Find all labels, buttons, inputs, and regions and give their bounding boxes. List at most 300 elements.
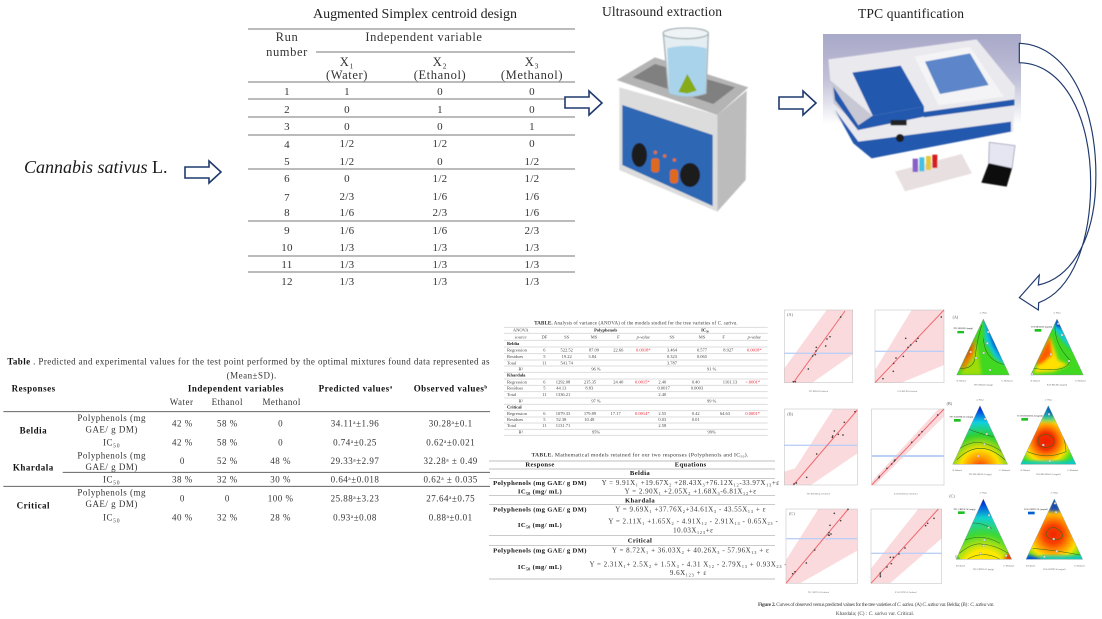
table rows: 1/6 bbox=[433, 191, 448, 203]
ternary A polyphenols: (A) bbox=[953, 314, 959, 319]
ternary A IC50: IC50 BELDIA (mg/ml) bbox=[1047, 383, 1067, 386]
ANOVA Beldia rows bbox=[507, 341, 762, 371]
ANOVA Beldia rows: 5 bbox=[543, 354, 546, 359]
ANOVA Beldia rows: 0.0018* bbox=[747, 348, 762, 353]
ANOVA Beldia rows: Total bbox=[507, 360, 517, 365]
row group: Khardala: 30 % bbox=[270, 475, 291, 485]
plot A IC50 bbox=[875, 310, 944, 393]
ANOVA Critical rows: 179.89 bbox=[584, 411, 597, 416]
ANOVA Khardala rows: 2.40 bbox=[658, 379, 667, 384]
row group: Critical: IC₅₀ bbox=[103, 513, 120, 523]
design table heading: Augmented Simplex centroid design bbox=[313, 7, 517, 22]
table rows: 2 bbox=[284, 104, 290, 116]
ternary B polyphenols: A: Water bbox=[976, 399, 984, 402]
ternary B polyphenols bbox=[947, 399, 1011, 476]
table rows: 1/2 bbox=[433, 173, 447, 185]
ANOVA header: F bbox=[617, 335, 620, 340]
table rows: 7 bbox=[284, 192, 290, 204]
ANOVA Critical rows: Total bbox=[507, 423, 517, 428]
table rows bbox=[281, 86, 540, 288]
table rows: 11 bbox=[281, 259, 293, 271]
ANOVA Critical rows: 95% bbox=[592, 429, 600, 434]
ANOVA Critical rows: 2.55 bbox=[658, 411, 667, 416]
ternary B polyphenols: B: Ethanol bbox=[953, 470, 962, 472]
ANOVA Critical rows bbox=[507, 404, 761, 434]
ternary A polyphenols: TPC BELDIA (mg/g) bbox=[974, 383, 993, 386]
ternary C polyphenols: B: Ethanol bbox=[956, 566, 966, 568]
row group: Critical: 0.93ᵃ±0.08 bbox=[333, 513, 377, 523]
ANOVA Critical rows: 1131.71 bbox=[556, 423, 570, 428]
table rows: 1 bbox=[437, 104, 443, 116]
table rows: 6 bbox=[284, 173, 290, 185]
Critical equations: Y = 8.72X₁ + 36.03X₂ + 40.26X₃ - 57.96X₁₃ + ε bbox=[612, 547, 769, 555]
table rows: 2/3 bbox=[340, 191, 355, 203]
ANOVA Beldia rows: 0.065 bbox=[697, 354, 708, 359]
plot B polyphenols bbox=[784, 409, 857, 496]
row group: Khardala bbox=[13, 450, 478, 485]
Beldia equations bbox=[493, 470, 780, 496]
table header: X₃ bbox=[525, 55, 539, 69]
plot A IC50: IC50 BELDIA Predicted bbox=[898, 390, 917, 393]
plot C polyphenols: TPC CRITICAL Predicted bbox=[808, 591, 829, 594]
ANOVA Critical rows: 64.63 bbox=[720, 411, 731, 416]
ANOVA Khardala rows: 99 % bbox=[707, 398, 717, 403]
table rows: 10 bbox=[281, 242, 293, 254]
table rows: 9 bbox=[284, 225, 290, 237]
panel: ternary contour plots bbox=[947, 312, 1087, 571]
Critical equations: Y = 2.31X₁+ 2.5X₂ + 1.5X₃ - 4.31 X₁₂ - 2.79X₁₃ + 0.93X₂₃ - bbox=[589, 560, 787, 568]
ternary C IC50: C: Methanol bbox=[1074, 566, 1085, 568]
ANOVA Khardala rows: 44.13 bbox=[556, 386, 567, 391]
plot B IC50: IC50 KHARDALA Predicted bbox=[894, 493, 917, 496]
ternary B polyphenols: (B) bbox=[947, 401, 953, 406]
column headers: Predicted values bbox=[319, 384, 390, 394]
ANOVA Critical rows: 99% bbox=[708, 429, 716, 434]
row group: Khardala: Polyphenols (mg bbox=[77, 450, 146, 460]
table header: X₂ bbox=[433, 55, 447, 69]
ternary A polyphenols bbox=[953, 312, 1013, 386]
plot B polyphenols: (B) bbox=[787, 411, 794, 416]
row group: Beldia: 0 bbox=[278, 438, 283, 448]
table header: X₁ bbox=[340, 55, 354, 69]
table rows: 1/3 bbox=[340, 259, 355, 271]
icon: ultrasonic bath with beaker bbox=[617, 28, 748, 212]
row group: Beldia: GAE/ g DM) bbox=[85, 425, 138, 435]
row group: Critical: 100 % bbox=[268, 494, 294, 504]
Khardala equations: 10.03X₁₂₃+ε bbox=[673, 526, 714, 534]
ANOVA Critical rows: Critical bbox=[507, 404, 522, 409]
ternary B IC50: A: Water bbox=[1044, 399, 1052, 402]
plot B polyphenols: TPC KHARDALA Predicted bbox=[807, 493, 830, 496]
ANOVA Beldia rows: Residues bbox=[507, 354, 523, 359]
ANOVA Beldia rows: 541.74 bbox=[560, 360, 574, 365]
ternary C polyphenols: TPC CRITICAL (mg/g) bbox=[973, 568, 994, 571]
table rows: 1/2 bbox=[433, 138, 447, 150]
table rows: 0 bbox=[344, 104, 350, 116]
table rows: 0 bbox=[437, 121, 443, 133]
row group: Beldia: IC₅₀ bbox=[103, 438, 120, 448]
ANOVA Critical rows: 6 bbox=[543, 411, 546, 416]
Critical equations: 9.6X₁₂₃ + ε bbox=[670, 569, 707, 577]
row group: Beldia: 0 bbox=[278, 419, 283, 429]
ternary C IC50: IC50 CRITICAL (mg/ml) bbox=[1024, 508, 1048, 511]
ternary C polyphenols: C: Methanol bbox=[1003, 566, 1015, 568]
table rows: 8 bbox=[284, 207, 290, 219]
panel: ANOVA table bbox=[504, 321, 768, 435]
table header: Run bbox=[276, 30, 298, 44]
plot A polyphenols: (A) bbox=[787, 312, 794, 317]
row group: Critical: Critical bbox=[17, 501, 50, 511]
ANOVA header: SS bbox=[669, 335, 675, 340]
ternary C IC50: B: Ethanol bbox=[1026, 566, 1036, 568]
panel: predicted vs observed table bbox=[3, 356, 490, 523]
ANOVA Beldia rows: 87.09 bbox=[589, 348, 600, 353]
plot A polyphenols bbox=[784, 310, 853, 393]
table caption: Table . Predicted and experimental values for the test point performed by the optimal mixtures found data represented as bbox=[7, 356, 490, 366]
row group: Khardala: 0 bbox=[180, 456, 185, 466]
Critical equations: Polyphenols (mg GAE/ g DM) bbox=[493, 548, 587, 555]
ANOVA Khardala rows: 0.0003 bbox=[691, 386, 704, 391]
row group: Beldia bbox=[20, 413, 475, 448]
row group: Critical: 0 bbox=[225, 494, 230, 504]
ternary C IC50 bbox=[1023, 491, 1087, 571]
ANOVA Khardala rows: Residues bbox=[507, 386, 523, 391]
ANOVA Khardala rows: 2.40 bbox=[658, 392, 667, 397]
Khardala equations: Polyphenols (mg GAE/ g DM) bbox=[493, 506, 587, 513]
row group: Critical: 27.64ᵃ±0.75 bbox=[426, 494, 475, 504]
ANOVA Khardala rows: 0.0015* bbox=[635, 379, 650, 384]
table header: (Methanol) bbox=[501, 68, 563, 82]
table rows: 0 bbox=[437, 156, 443, 168]
table header: (Ethanol) bbox=[414, 68, 466, 82]
table rows: 1/6 bbox=[340, 225, 355, 237]
TPC heading: TPC quantification bbox=[858, 6, 964, 21]
ternary B IC50: IC50 KHARDALA (mg/ml) bbox=[1017, 414, 1043, 417]
ANOVA Critical rows: 52.38 bbox=[556, 417, 567, 422]
ANOVA Khardala rows: 5 bbox=[543, 386, 546, 391]
table rows: 1/3 bbox=[525, 242, 540, 254]
plant name label: Cannabis sativus L. bbox=[24, 157, 168, 177]
row group: Khardala: 29.33ᵃ±2.97 bbox=[331, 456, 379, 466]
row group: Khardala: 52 % bbox=[217, 456, 238, 466]
table rows: 1/6 bbox=[525, 207, 540, 219]
column headers: Methanol bbox=[262, 397, 301, 407]
table rows: 1/2 bbox=[340, 138, 354, 150]
plot C IC50: IC50 CRITICAL Predicted bbox=[895, 591, 916, 594]
ternary A IC50: IC50 BELDIA (mg/ml) bbox=[1031, 325, 1052, 328]
ternary B IC50: C: Methanol bbox=[1067, 470, 1079, 472]
table header bbox=[266, 30, 563, 82]
table rows: 0 bbox=[344, 173, 350, 185]
figure caption: Figure 2. Curves of observed versus predicted values for the tree varieties of C. sativa. (A) C. sativa var. Beldia; (B) : C. sativa var. bbox=[758, 601, 994, 608]
table rows: 3 bbox=[284, 121, 290, 133]
ANOVA header: DF bbox=[541, 335, 548, 340]
table rows: 2/3 bbox=[525, 225, 540, 237]
ANOVA Critical rows: 17.17 bbox=[611, 411, 621, 416]
ternary C polyphenols: (C) bbox=[949, 494, 955, 499]
ANOVA Beldia rows: 3.84 bbox=[588, 354, 597, 359]
table rows: 0 bbox=[529, 104, 535, 116]
table rows: 2/3 bbox=[433, 207, 448, 219]
ANOVA header: IC₅₀ bbox=[701, 328, 709, 333]
ANOVA Khardala rows: R² bbox=[518, 398, 523, 403]
ANOVA Beldia rows: Beldia bbox=[507, 341, 520, 346]
column headers: Independent variables bbox=[188, 384, 284, 394]
ternary A IC50: C: Methanol bbox=[1075, 381, 1086, 383]
row group: Khardala: 32 % bbox=[217, 475, 238, 485]
ANOVA Beldia rows: 22.66 bbox=[613, 348, 624, 353]
table rows: 1 bbox=[344, 86, 350, 98]
ternary B polyphenols: TPC KHARDALA (mg/g) bbox=[969, 473, 992, 476]
ternary C polyphenols: TPC CRITICAL (mg/g) bbox=[953, 508, 976, 511]
table rows: 1/6 bbox=[433, 225, 448, 237]
icon: spectrophotometer with cuvettes bbox=[823, 34, 1021, 191]
table rows: 1/2 bbox=[340, 156, 354, 168]
row group: Beldia: Polyphenols (mg bbox=[77, 413, 146, 423]
ANOVA Khardala rows: 0.40 bbox=[692, 379, 700, 384]
arrow: plant to design table bbox=[185, 161, 221, 183]
Khardala equations bbox=[493, 497, 778, 534]
ANOVA Beldia rows: 0.577 bbox=[697, 348, 708, 353]
row group: Critical: Polyphenols (mg bbox=[77, 487, 146, 497]
ultrasound heading: Ultrasound extraction bbox=[602, 4, 722, 19]
ANOVA Khardala rows: Total bbox=[507, 392, 517, 397]
ANOVA header: p-value bbox=[747, 335, 761, 340]
models caption: TABLE. Mathematical models retained for our two responses (Polyphenols and IC₅₀). bbox=[531, 451, 749, 458]
ANOVA Critical rows: 1079.33 bbox=[556, 411, 571, 416]
table caption bbox=[7, 356, 490, 380]
row group: Critical: 32 % bbox=[217, 513, 238, 523]
ANOVA Khardala rows: 24.40 bbox=[613, 379, 624, 384]
ternary B polyphenols: C: Methanol bbox=[999, 470, 1011, 472]
ANOVA Beldia rows: 3.787 bbox=[667, 360, 678, 365]
ANOVA Critical rows: Residues bbox=[507, 417, 523, 422]
ANOVA Critical rows: 10.48 bbox=[584, 417, 595, 422]
row group: Beldia: 30.28ᵃ±0.1 bbox=[429, 419, 473, 429]
ANOVA header: Polyphenols bbox=[594, 328, 618, 333]
ANOVA Beldia rows: R² bbox=[518, 366, 523, 371]
ternary A IC50: A: Water bbox=[1053, 312, 1061, 315]
models header: Response bbox=[525, 462, 555, 469]
table caption: (Mean±SD). bbox=[227, 370, 277, 380]
ANOVA header: ANOVA bbox=[513, 328, 529, 333]
row group: Critical: 40 % bbox=[172, 513, 193, 523]
column headers: Ethanol bbox=[212, 397, 243, 407]
column headers: Observed values bbox=[414, 384, 484, 394]
ANOVA header: MS bbox=[699, 335, 706, 340]
ANOVA Khardala rows: 11 bbox=[542, 392, 546, 397]
ternary A polyphenols: C: Methanol bbox=[1002, 381, 1013, 383]
row group: Khardala: 48 % bbox=[270, 456, 291, 466]
ANOVA Khardala rows: Regression bbox=[507, 379, 528, 384]
models header bbox=[525, 462, 707, 469]
ANOVA Khardala rows: 0.0017 bbox=[657, 386, 671, 391]
row group: Critical: 25.88ᵃ±3.23 bbox=[331, 494, 379, 504]
ANOVA caption: TABLE. Analysis of variance (ANOVA) of the models studied for the tree varieties of C. sativa. bbox=[534, 321, 738, 326]
Khardala equations: Khardala bbox=[625, 497, 655, 504]
ANOVA Khardala rows: 1336.21 bbox=[556, 392, 570, 397]
ternary C IC50: A: Water bbox=[1050, 491, 1058, 494]
table rows: 1/3 bbox=[433, 242, 448, 254]
table rows: 1/3 bbox=[340, 242, 355, 254]
ANOVA Beldia rows: 91 % bbox=[707, 366, 717, 371]
Critical equations: Critical bbox=[628, 538, 652, 545]
ANOVA Beldia rows: 96 % bbox=[591, 366, 601, 371]
column headers: b bbox=[484, 386, 488, 391]
row group: Khardala: 0.64ᵃ±0.018 bbox=[331, 475, 379, 485]
row group: Khardala: IC₅₀ bbox=[103, 475, 120, 485]
ternary B IC50: B: Ethanol bbox=[1021, 470, 1030, 472]
plot A polyphenols: TPC BELDIA Predicted bbox=[809, 390, 828, 393]
column headers: a bbox=[390, 386, 393, 391]
table rows: 12 bbox=[281, 276, 293, 288]
ANOVA header: MS bbox=[591, 335, 598, 340]
table rows: 0 bbox=[344, 121, 350, 133]
table rows: 1/3 bbox=[525, 276, 540, 288]
table rows: 0 bbox=[437, 86, 443, 98]
ternary C IC50: IC50 CRITICAL (mg/ml) bbox=[1043, 568, 1066, 571]
Critical equations bbox=[493, 538, 787, 577]
ANOVA Khardala rows: Khardala bbox=[507, 373, 526, 378]
row group: Critical: 28 % bbox=[270, 513, 291, 523]
ANOVA Critical rows: Regression bbox=[507, 411, 528, 416]
arrow: ultrasound to TPC bbox=[779, 91, 816, 115]
ANOVA Khardala rows: 8.83 bbox=[585, 386, 594, 391]
ANOVA Critical rows: R² bbox=[518, 429, 523, 434]
panel: mathematical models table bbox=[489, 451, 787, 579]
column headers: Water bbox=[170, 397, 194, 407]
table header: number bbox=[266, 45, 308, 59]
simplex centroid design table bbox=[248, 29, 575, 288]
plot C IC50 bbox=[871, 509, 942, 594]
ANOVA Khardala rows: 215.35 bbox=[584, 379, 597, 384]
ANOVA Khardala rows: 97 % bbox=[591, 398, 601, 403]
row group: Critical: 0.88ᵃ±0.01 bbox=[429, 513, 473, 523]
table rows: 1/2 bbox=[525, 156, 539, 168]
ternary A IC50 bbox=[1027, 312, 1087, 386]
ANOVA Critical rows: 0.0001* bbox=[745, 411, 761, 416]
row group: Khardala: 0.62ᵃ ± 0.035 bbox=[423, 475, 478, 485]
ANOVA Critical rows: 0.42 bbox=[692, 411, 700, 416]
ANOVA Critical rows: 0.03 bbox=[658, 417, 667, 422]
ANOVA Khardala rows bbox=[507, 373, 761, 403]
table rows: 5 bbox=[284, 156, 290, 168]
table header: Independent variable bbox=[365, 30, 483, 44]
ternary A polyphenols: TPC BELDIA (mg/g) bbox=[953, 327, 973, 330]
row group: Critical: 0 bbox=[180, 494, 185, 504]
ternary C polyphenols bbox=[949, 491, 1015, 571]
ternary A IC50: B: Ethanol bbox=[1031, 381, 1040, 383]
row group: Beldia: 34.11ᵃ±1.96 bbox=[331, 419, 379, 429]
panel: observed vs predicted plots bbox=[784, 310, 944, 594]
table rows: 1 bbox=[284, 86, 290, 98]
ANOVA Beldia rows: 3.464 bbox=[667, 348, 678, 353]
ternary C polyphenols: A: Water bbox=[979, 491, 987, 494]
column headers: Responses bbox=[12, 384, 56, 394]
row group: Beldia: Beldia bbox=[20, 426, 47, 436]
ANOVA Critical rows: 5 bbox=[543, 417, 546, 422]
table rows: 1/3 bbox=[433, 276, 448, 288]
column headers bbox=[12, 384, 488, 407]
ANOVA header: F bbox=[722, 335, 725, 340]
ANOVA header: p-value bbox=[636, 335, 650, 340]
Beldia equations: Beldia bbox=[630, 470, 650, 477]
ANOVA Beldia rows: Regression bbox=[507, 348, 528, 353]
ANOVA Beldia rows: 522.52 bbox=[560, 348, 573, 353]
ANOVA Critical rows: 0.01 bbox=[692, 417, 700, 422]
row group: Beldia: 58 % bbox=[217, 419, 238, 429]
row group: Critical: GAE/ g DM) bbox=[85, 499, 138, 509]
table rows: 1/6 bbox=[525, 191, 540, 203]
ANOVA Beldia rows: 11 bbox=[542, 360, 546, 365]
ternary A polyphenols: A: Water bbox=[979, 312, 987, 315]
Khardala equations: Y = 9.69X₁ +37.76X₂+34.61X₃ - 43.55X₁₃ + ε bbox=[615, 505, 766, 513]
ANOVA Khardala rows: <.0001* bbox=[745, 379, 761, 384]
plot B IC50 bbox=[872, 409, 944, 496]
table rows: 1 bbox=[529, 121, 535, 133]
row group: Beldia: 42 % bbox=[172, 419, 193, 429]
ternary A polyphenols: B: Ethanol bbox=[957, 381, 966, 383]
Beldia equations: Y = 9.91X₁ +19.67X₂ +28.43X₃+76.12X₁₂-33.97X₁₃+ε bbox=[602, 479, 780, 487]
table rows: 1/3 bbox=[340, 276, 355, 288]
row group: Khardala: Khardala bbox=[13, 463, 54, 473]
Beldia equations: Y = 2.90X₁ +2.05X₂ +1.68X₃-6.81X₁₂+ε bbox=[625, 488, 757, 496]
ANOVA Beldia rows: 19.22 bbox=[562, 354, 572, 359]
row group: Khardala: 32.28ᵃ ± 0.49 bbox=[423, 456, 478, 466]
table rows: 4 bbox=[284, 139, 290, 151]
table rows: 1/3 bbox=[525, 259, 540, 271]
row group: Beldia: 42 % bbox=[172, 438, 193, 448]
Beldia equations: Polyphenols (mg GAE/ g DM) bbox=[493, 480, 587, 487]
table header: (Water) bbox=[326, 68, 368, 82]
row group: Beldia: 58 % bbox=[217, 438, 238, 448]
curved arrow: TPC to results bbox=[1019, 43, 1096, 310]
ANOVA Critical rows: 0.0014* bbox=[635, 411, 650, 416]
ANOVA Beldia rows: 0.0018* bbox=[636, 348, 651, 353]
ANOVA Khardala rows: 1292.08 bbox=[556, 379, 571, 384]
row group: Beldia: 0.74ᵃ±0.25 bbox=[333, 438, 377, 448]
table rows: 1/6 bbox=[340, 207, 355, 219]
ANOVA Critical rows: 11 bbox=[542, 423, 546, 428]
ternary B IC50 bbox=[1017, 399, 1079, 476]
Khardala equations: IC₅₀ (mg/ mL) bbox=[518, 522, 562, 529]
row group: Khardala: GAE/ g DM) bbox=[85, 462, 138, 472]
table rows: 0 bbox=[529, 138, 535, 150]
ANOVA Beldia rows: 0.323 bbox=[667, 354, 678, 359]
ANOVA header bbox=[513, 328, 761, 340]
Beldia equations: IC₅₀ (mg/ mL) bbox=[518, 489, 562, 496]
arrow: table to ultrasound bbox=[565, 91, 602, 115]
table rows: 0 bbox=[529, 86, 535, 98]
Khardala equations: Y = 2.11X₁ +1.65X₂ - 4.91X₁₂ - 2.91X₁₃ - 0.65X₂₃ - bbox=[608, 518, 778, 526]
figure caption: Khardala; (C) : C. sativa var. Critical. bbox=[836, 610, 914, 617]
Critical equations: IC₅₀ (mg/ mL) bbox=[518, 564, 562, 571]
row group: Khardala: 38 % bbox=[172, 475, 193, 485]
ANOVA Beldia rows: 8.927 bbox=[723, 348, 734, 353]
plot C polyphenols: (C) bbox=[789, 511, 795, 516]
table rows: 1/3 bbox=[433, 259, 448, 271]
models header: Equations bbox=[675, 462, 707, 469]
row group: Critical bbox=[17, 487, 475, 523]
ANOVA Khardala rows: 6 bbox=[543, 379, 546, 384]
ANOVA header: source bbox=[515, 335, 527, 340]
ANOVA Khardala rows: 1161.13 bbox=[723, 379, 738, 384]
row group: Beldia: 0.62ᵃ±0.021 bbox=[426, 438, 475, 448]
figure caption bbox=[758, 601, 994, 617]
ANOVA Beldia rows: 6 bbox=[543, 348, 546, 353]
ternary B IC50: IC50 KHARDALA (mg/ml) bbox=[1036, 473, 1061, 476]
ANOVA Critical rows: 2.58 bbox=[658, 423, 667, 428]
